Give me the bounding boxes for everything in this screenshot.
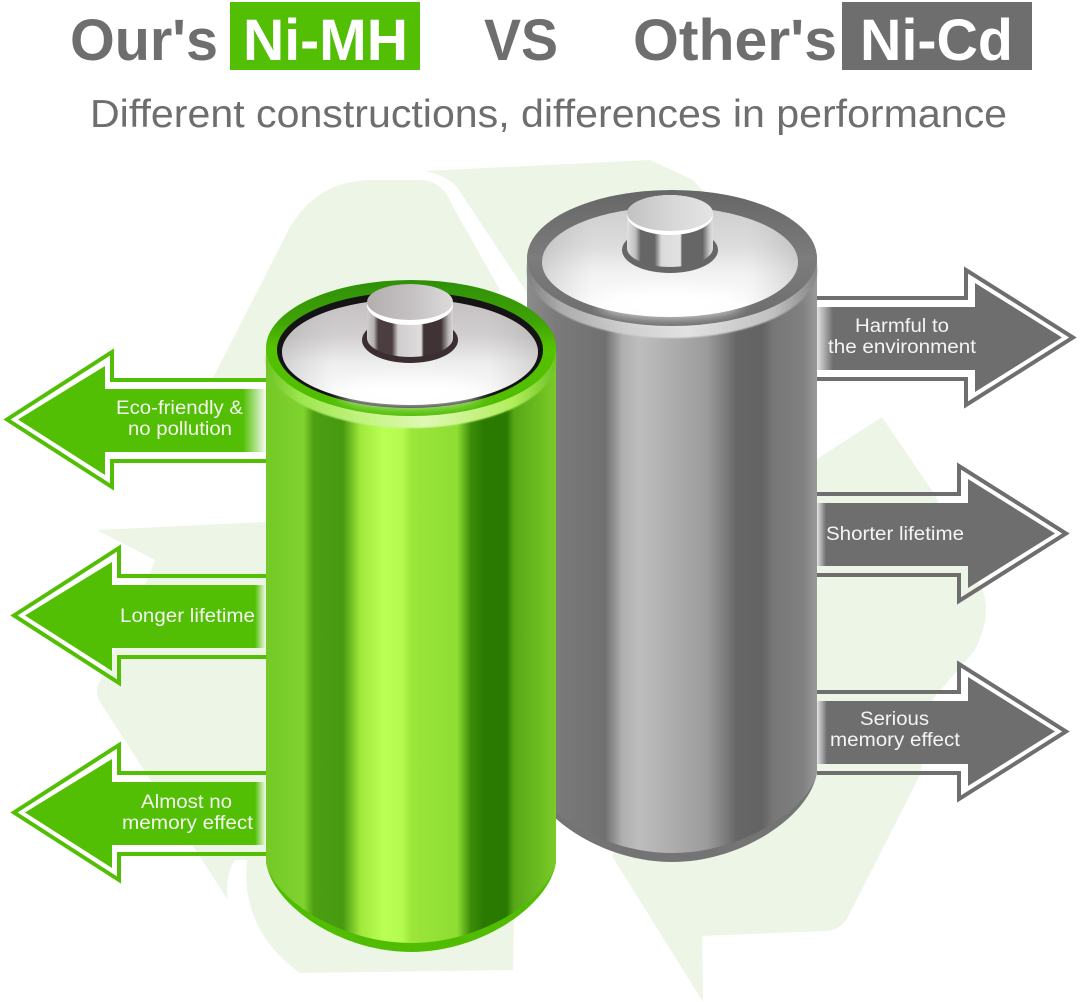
arrow: longer lifetime xyxy=(14,548,266,683)
heading: VS: VS xyxy=(484,8,558,73)
subtitle: Different constructions, differences in performance xyxy=(90,93,1007,136)
heading: Other's: Other's xyxy=(633,8,837,73)
terminal xyxy=(362,284,458,363)
arrow: serious memory effect: Serious xyxy=(860,709,929,730)
terminal xyxy=(622,195,718,273)
label: Ni-MH: Ni-MH xyxy=(243,8,408,73)
arrow: serious memory effect xyxy=(817,664,1066,799)
battery: green Ni-MH xyxy=(266,280,556,952)
arrow: eco-friendly: Eco-friendly & xyxy=(116,398,243,419)
arrow: shorter lifetime xyxy=(817,466,1066,601)
background recycling symbol xyxy=(97,160,986,1002)
arrow: serious memory effect: memory effect xyxy=(830,730,961,751)
heading: Our's: Our's xyxy=(70,8,218,73)
arrow: almost no memory effect xyxy=(14,745,266,880)
arrow: harmful to the environment xyxy=(817,270,1073,405)
arrow: eco-friendly xyxy=(7,352,266,487)
arrow: almost no memory effect: memory effect xyxy=(122,813,254,834)
arrow: shorter lifetime: Shorter lifetime xyxy=(826,524,964,545)
arrow: longer lifetime: Longer lifetime xyxy=(120,606,255,627)
arrow: harmful to the environment: Harmful to xyxy=(855,316,949,337)
title xyxy=(70,2,1032,73)
label: Ni-Cd: Ni-Cd xyxy=(860,8,1013,73)
arrow: harmful to the environment: the environment xyxy=(828,337,977,358)
arrow: almost no memory effect: Almost no xyxy=(141,792,232,813)
arrow: eco-friendly: no pollution xyxy=(128,419,232,440)
battery: grey Ni-Cd xyxy=(527,190,817,862)
